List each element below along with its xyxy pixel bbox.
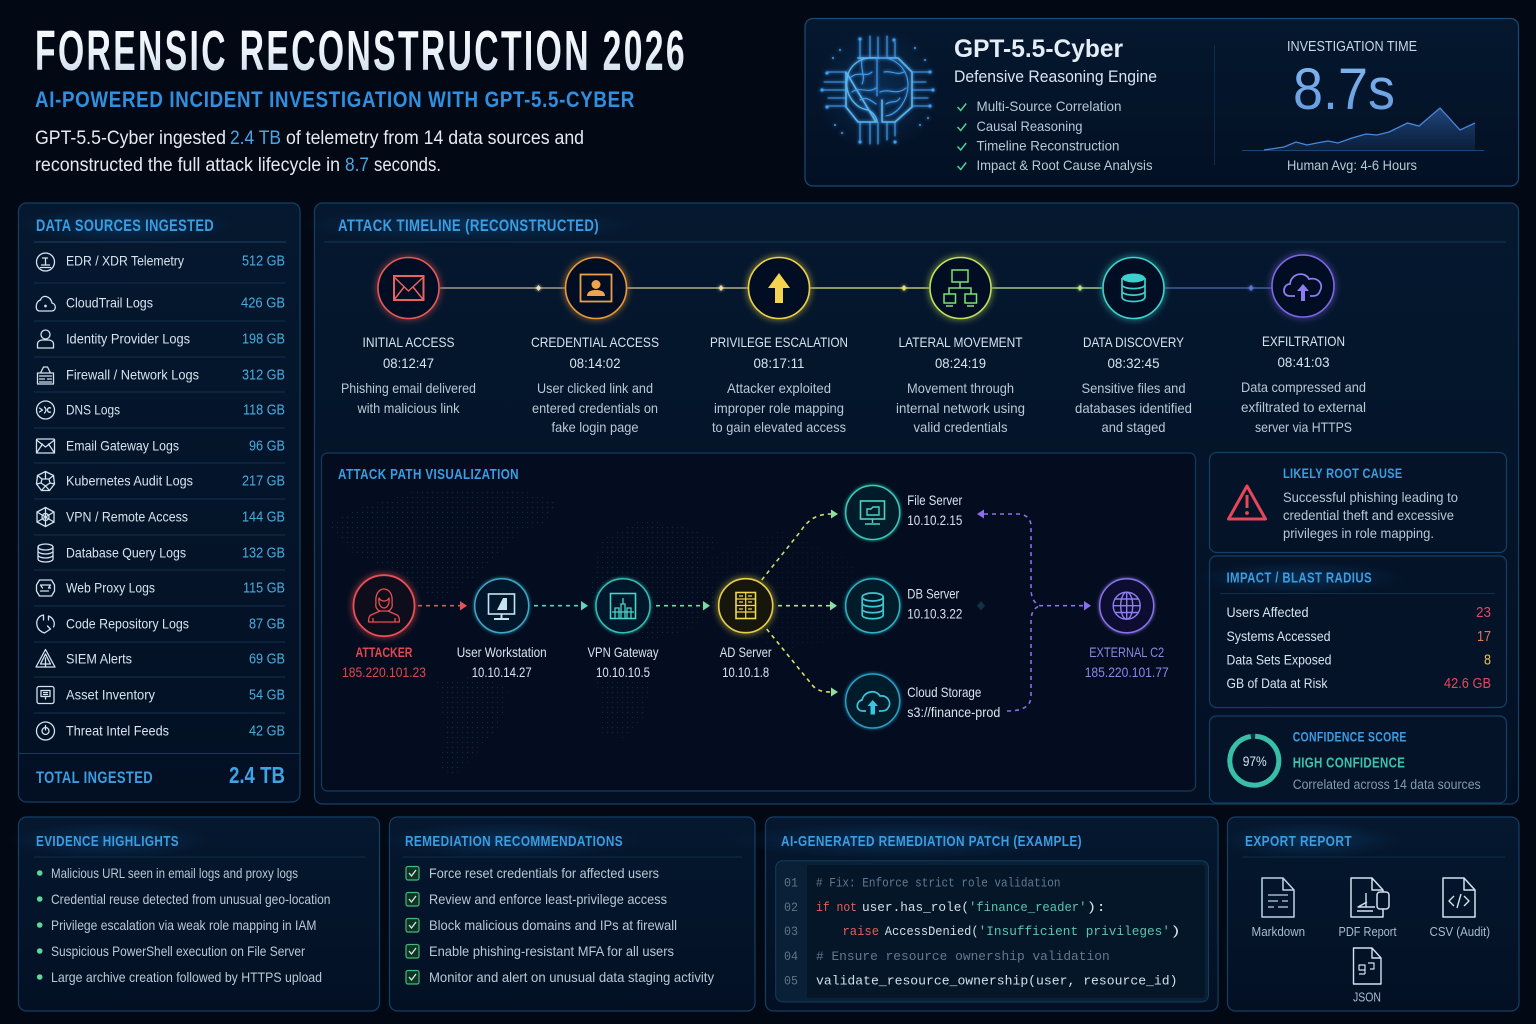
row: DNS Logs: 118 GB <box>243 402 285 418</box>
node: attacker <box>342 575 426 680</box>
metric: users affected: 23 <box>1476 605 1491 621</box>
step: exfiltration: server via HTTPS <box>1255 419 1352 435</box>
summary text: reconstructed the full attack lifecycle in <box>35 155 340 176</box>
summary text: seconds. <box>374 155 441 176</box>
investigation time label: INVESTIGATION TIME <box>1287 39 1417 55</box>
line numbers: 04 <box>784 949 798 964</box>
total ingested: 2.4 TB <box>229 762 285 788</box>
remediation checklist: Force reset credentials for affected users <box>429 865 659 881</box>
step: data discovery: databases identified <box>1075 400 1192 416</box>
confidence text: CONFIDENCE SCORE <box>1293 729 1407 745</box>
node: DB server: DB Server <box>907 586 960 602</box>
card: impact / blast radius <box>1195 556 1506 708</box>
evidence list: Privilege escalation via weak role mapping in IAM <box>51 917 316 933</box>
evidence list: Credential reuse detected from unusual geo-location <box>51 891 330 907</box>
panel: GPT-5.5-Cyber engine and investigation time <box>805 18 1518 186</box>
heading: root cause: LIKELY ROOT CAUSE <box>1283 465 1402 481</box>
row: Kubernetes Audit Logs: 217 GB <box>242 474 285 490</box>
confidence text: HIGH CONFIDENCE <box>1293 754 1405 772</box>
code lines: ): <box>1086 900 1106 915</box>
remediation checklist <box>406 865 714 985</box>
line numbers: 05 <box>784 974 798 988</box>
row: Code Repository Logs <box>37 615 285 633</box>
node: AD server: 10.10.1.8 <box>722 664 769 680</box>
code lines: 'Insufficient privileges' <box>979 924 1170 939</box>
summary text: of telemetry from 14 data sources and <box>286 128 584 149</box>
row: Threat Intel Feeds <box>36 722 285 740</box>
step: lateral movement: LATERAL MOVEMENT <box>898 334 1023 350</box>
export: PDF report <box>1338 878 1397 939</box>
node: file server: File Server <box>907 492 963 508</box>
row: Identity Provider Logs: 198 GB <box>242 332 285 348</box>
step: initial access: Phishing email delivered <box>341 380 476 396</box>
remediation checklist: Enable phishing-resistant MFA for all users <box>429 943 674 959</box>
step: lateral movement: valid credentials <box>914 419 1008 435</box>
metric: systems accessed: 17 <box>1477 629 1491 645</box>
capability checklist: Causal Reasoning <box>976 118 1082 134</box>
node: external C2: 185.220.101.77 <box>1085 664 1169 680</box>
step: initial access: 08:12:47 <box>383 355 434 371</box>
line numbers: 03 <box>784 924 798 939</box>
row: Firewall / Network Logs <box>38 366 285 384</box>
row: VPN / Remote Access: 144 GB <box>242 510 285 526</box>
arrow: AD to cloud storage <box>767 629 838 696</box>
step: initial access: with malicious link <box>357 400 460 416</box>
row: Threat Intel Feeds: Threat Intel Feeds <box>66 722 169 738</box>
row: CloudTrail Logs: CloudTrail Logs <box>66 294 153 310</box>
node: cloud storage <box>846 674 1000 728</box>
row: CloudTrail Logs <box>36 294 285 312</box>
metric: GB of data at risk: 42.6 GB <box>1444 676 1491 692</box>
heading: attack timeline: ATTACK TIMELINE (RECONSTRUCTED) <box>338 216 599 235</box>
capability checklist: Impact & Root Cause Analysis <box>976 157 1152 173</box>
arrow: workstation to VPN <box>534 601 588 610</box>
summary text: 2.4 TB <box>230 128 281 149</box>
arrow: AD to file server <box>762 510 838 580</box>
total ingested: TOTAL INGESTED <box>36 768 153 787</box>
root cause text <box>1283 489 1458 541</box>
node: external C2 <box>1085 579 1169 680</box>
row: DNS Logs <box>36 401 285 419</box>
code lines: raise <box>842 924 879 939</box>
metric: GB of data at risk <box>1226 675 1491 692</box>
investigation time value: 8.7s <box>1293 57 1395 122</box>
row: Email Gateway Logs: Email Gateway Logs <box>66 438 179 454</box>
step: privilege escalation: PRIVILEGE ESCALATION <box>710 334 848 350</box>
code lines: validate_resource_ownership(user, resource_id) <box>816 974 1178 988</box>
metric: users affected: Users Affected <box>1226 604 1308 620</box>
capability checklist: Timeline Reconstruction <box>976 138 1120 154</box>
node: VPN gateway: 10.10.10.5 <box>596 664 650 680</box>
node: attacker: ATTACKER <box>356 644 412 660</box>
sparkline chart <box>1242 108 1484 150</box>
row: Database Query Logs <box>38 544 285 562</box>
evidence list: Large archive creation followed by HTTPS upload <box>51 969 322 985</box>
code lines: user.has_role( <box>862 900 969 915</box>
step: privilege escalation: 08:17:11 <box>754 355 805 371</box>
summary text: 8.7 <box>345 155 369 176</box>
arrow: attacker to workstation <box>418 601 467 610</box>
evidence list: Suspicious PowerShell execution on File Server <box>51 943 305 959</box>
row: VPN / Remote Access: VPN / Remote Access <box>66 508 188 524</box>
step: lateral movement: internal network using <box>896 400 1025 416</box>
row: VPN / Remote Access <box>37 508 285 526</box>
root cause text: Successful phishing leading to <box>1283 489 1458 505</box>
heading: evidence: EVIDENCE HIGHLIGHTS <box>36 833 179 850</box>
engine name: GPT-5.5-Cyber <box>954 35 1123 63</box>
code lines <box>816 876 1181 988</box>
engine subtitle: Defensive Reasoning Engine <box>954 67 1157 86</box>
code lines: # Fix: Enforce strict role validation <box>816 876 1060 890</box>
row: Kubernetes Audit Logs: Kubernetes Audit Logs <box>66 472 193 488</box>
row: Kubernetes Audit Logs <box>36 472 285 490</box>
step: data discovery: and staged <box>1102 419 1166 435</box>
step: credential access: entered credentials on <box>532 400 658 416</box>
heading: data sources: DATA SOURCES INGESTED <box>36 216 214 235</box>
capability checklist: Multi-Source Correlation <box>976 98 1122 114</box>
arrow: AD to DB <box>778 601 837 610</box>
node: AD server: AD Server <box>720 644 772 660</box>
line numbers <box>784 876 798 988</box>
step: initial access <box>341 258 476 416</box>
header: title block <box>35 19 687 176</box>
code lines: 'finance_reader' <box>969 900 1086 915</box>
step: lateral movement: Movement through <box>907 380 1014 396</box>
timeline connector line <box>440 285 1272 291</box>
metric: data sets exposed <box>1226 652 1491 668</box>
heading: export: EXPORT REPORT <box>1245 833 1352 850</box>
line numbers: 01 <box>784 876 798 890</box>
step: privilege escalation: to gain elevated access <box>712 419 846 435</box>
row: Identity Provider Logs <box>38 330 285 348</box>
step: credential access: 08:14:02 <box>570 355 621 371</box>
step: credential access <box>531 258 659 435</box>
summary text <box>35 128 584 176</box>
card: confidence score <box>1210 716 1506 803</box>
heading: patch: AI-GENERATED REMEDIATION PATCH (EXAMPLE) <box>781 833 1082 850</box>
row: Database Query Logs: 132 GB <box>242 546 285 562</box>
metric: systems accessed: Systems Accessed <box>1226 628 1330 644</box>
step: data discovery: Sensitive files and <box>1082 380 1186 396</box>
row: EDR / XDR Telemetry <box>36 252 285 271</box>
node: cloud storage: Cloud Storage <box>907 684 981 700</box>
row: SIEM Alerts: SIEM Alerts <box>66 650 132 666</box>
row: Email Gateway Logs <box>36 438 285 454</box>
row: Database Query Logs: Database Query Logs <box>66 544 186 560</box>
confidence text <box>1293 729 1481 792</box>
icon: circuit brain <box>820 36 935 144</box>
step: exfiltration: EXFILTRATION <box>1262 333 1345 349</box>
node: VPN gateway: VPN Gateway <box>588 644 658 660</box>
node: user workstation: User Workstation <box>457 644 547 660</box>
node: VPN gateway <box>588 579 658 680</box>
step: credential access: User clicked link and <box>537 380 653 396</box>
total ingested <box>36 762 285 788</box>
row: Code Repository Logs: 87 GB <box>249 616 285 632</box>
row: SIEM Alerts: 69 GB <box>249 652 285 668</box>
export: markdown <box>1252 878 1305 939</box>
metric: systems accessed <box>1226 628 1491 645</box>
row: Web Proxy Logs: 115 GB <box>243 580 285 596</box>
capability checklist <box>958 98 1152 173</box>
metric: GB of data at risk: GB of Data at Risk <box>1226 675 1328 691</box>
card: likely root cause <box>1210 452 1506 552</box>
row: Firewall / Network Logs: 312 GB <box>242 368 285 384</box>
row: Asset Inventory <box>37 686 285 704</box>
summary text: GPT-5.5-Cyber ingested <box>35 128 226 149</box>
row: DNS Logs: DNS Logs <box>66 402 120 418</box>
icon: warning triangle <box>1228 486 1266 519</box>
title: FORENSIC RECONSTRUCTION 2026 <box>35 19 687 83</box>
step: credential access: fake login page <box>552 419 639 435</box>
step: lateral movement: 08:24:19 <box>935 355 986 371</box>
step: privilege escalation <box>710 258 848 435</box>
step: data discovery: 08:32:45 <box>1108 355 1160 371</box>
remediation checklist: Monitor and alert on unusual data staging activity <box>429 969 714 985</box>
node: user workstation: 10.10.14.27 <box>472 664 532 680</box>
export: JSON <box>1353 948 1381 1004</box>
arrow: exfiltration paths to external C2 <box>977 510 1091 711</box>
remediation checklist: Review and enforce least-privilege access <box>429 891 667 907</box>
step: privilege escalation: improper role mapping <box>714 400 844 416</box>
confidence ring: 97% <box>1243 754 1267 769</box>
human average note: Human Avg: 4-6 Hours <box>1287 157 1417 173</box>
evidence list <box>37 865 331 985</box>
node: user workstation <box>457 579 547 680</box>
panel: attack timeline <box>300 203 1518 804</box>
root cause text: credential theft and excessive <box>1283 507 1454 523</box>
remediation checklist: Block malicious domains and IPs at firewall <box>429 917 677 933</box>
panel: remediation recommendations <box>380 817 755 1011</box>
metric: data sets exposed: 8 <box>1484 652 1491 668</box>
subtitle: AI-POWERED INCIDENT INVESTIGATION WITH GPT-5.5-CYBER <box>35 87 635 112</box>
row: Web Proxy Logs: Web Proxy Logs <box>66 580 155 596</box>
step: privilege escalation: Attacker exploited <box>727 380 831 396</box>
heading: impact: IMPACT / BLAST RADIUS <box>1226 570 1372 586</box>
export: CSV audit: CSV (Audit) <box>1430 924 1490 939</box>
row: Threat Intel Feeds: 42 GB <box>249 724 285 740</box>
panel: attack path visualization <box>322 453 1196 791</box>
confidence ring <box>1229 735 1280 786</box>
row: Firewall / Network Logs: Firewall / Network Logs <box>66 366 199 382</box>
node: DB server <box>846 579 962 633</box>
row: Code Repository Logs: Code Repository Logs <box>66 616 189 632</box>
step: data discovery <box>1075 258 1192 435</box>
export: CSV audit <box>1430 878 1490 939</box>
step: exfiltration <box>1241 255 1366 435</box>
metric: data sets exposed: Data Sets Exposed <box>1226 652 1332 668</box>
code lines: # Ensure resource ownership validation <box>816 949 1110 964</box>
step: data discovery: DATA DISCOVERY <box>1083 334 1185 350</box>
node: cloud storage: s3://finance-prod <box>907 704 1000 720</box>
heading: attack path: ATTACK PATH VISUALIZATION <box>338 466 519 483</box>
step: credential access: CREDENTIAL ACCESS <box>531 334 659 350</box>
dotted world map backdrop <box>326 490 870 775</box>
row: CloudTrail Logs: 426 GB <box>241 296 285 312</box>
metric: users affected <box>1226 604 1491 621</box>
confidence text: Correlated across 14 data sources <box>1293 777 1481 792</box>
root cause text: privileges in role mapping. <box>1283 525 1434 541</box>
row: Identity Provider Logs: Identity Provider Logs <box>66 330 190 346</box>
node: file server <box>846 486 963 540</box>
row: Web Proxy Logs <box>36 580 285 596</box>
step: exfiltration: exfiltrated to external <box>1241 399 1366 415</box>
code block <box>776 861 1208 1002</box>
node: file server: 10.10.2.15 <box>907 512 962 528</box>
row: EDR / XDR Telemetry: 512 GB <box>242 254 285 270</box>
arrow: VPN to AD <box>656 601 710 610</box>
row: Asset Inventory: Asset Inventory <box>66 686 155 702</box>
code lines: ) <box>1170 924 1181 939</box>
node: attacker: 185.220.101.23 <box>342 664 426 680</box>
panel: AI-generated remediation patch <box>730 817 1218 1011</box>
line numbers: 02 <box>784 900 798 915</box>
step: lateral movement <box>896 258 1025 435</box>
node: DB server: 10.10.3.22 <box>907 606 962 622</box>
step: initial access: INITIAL ACCESS <box>362 334 454 350</box>
row: EDR / XDR Telemetry: EDR / XDR Telemetry <box>66 252 184 268</box>
row: Asset Inventory: 54 GB <box>249 688 285 704</box>
export: PDF report: PDF Report <box>1338 924 1397 939</box>
code lines: AccessDenied( <box>885 924 979 939</box>
row: Email Gateway Logs: 96 GB <box>249 438 285 454</box>
code lines: if not <box>816 900 857 915</box>
step: exfiltration: Data compressed and <box>1241 379 1366 395</box>
evidence list: Malicious URL seen in email logs and proxy logs <box>51 865 298 881</box>
node: external C2: EXTERNAL C2 <box>1089 644 1164 660</box>
step: exfiltration: 08:41:03 <box>1278 354 1330 370</box>
row: SIEM Alerts <box>36 650 285 668</box>
heading: remediation: REMEDIATION RECOMMENDATIONS <box>405 833 623 850</box>
export: markdown: Markdown <box>1252 924 1305 939</box>
node: AD server <box>719 579 773 680</box>
export: JSON: JSON <box>1353 990 1381 1004</box>
panel: evidence highlights <box>10 817 380 1011</box>
panel: export report <box>1220 817 1519 1011</box>
panel: data sources ingested <box>15 203 300 802</box>
